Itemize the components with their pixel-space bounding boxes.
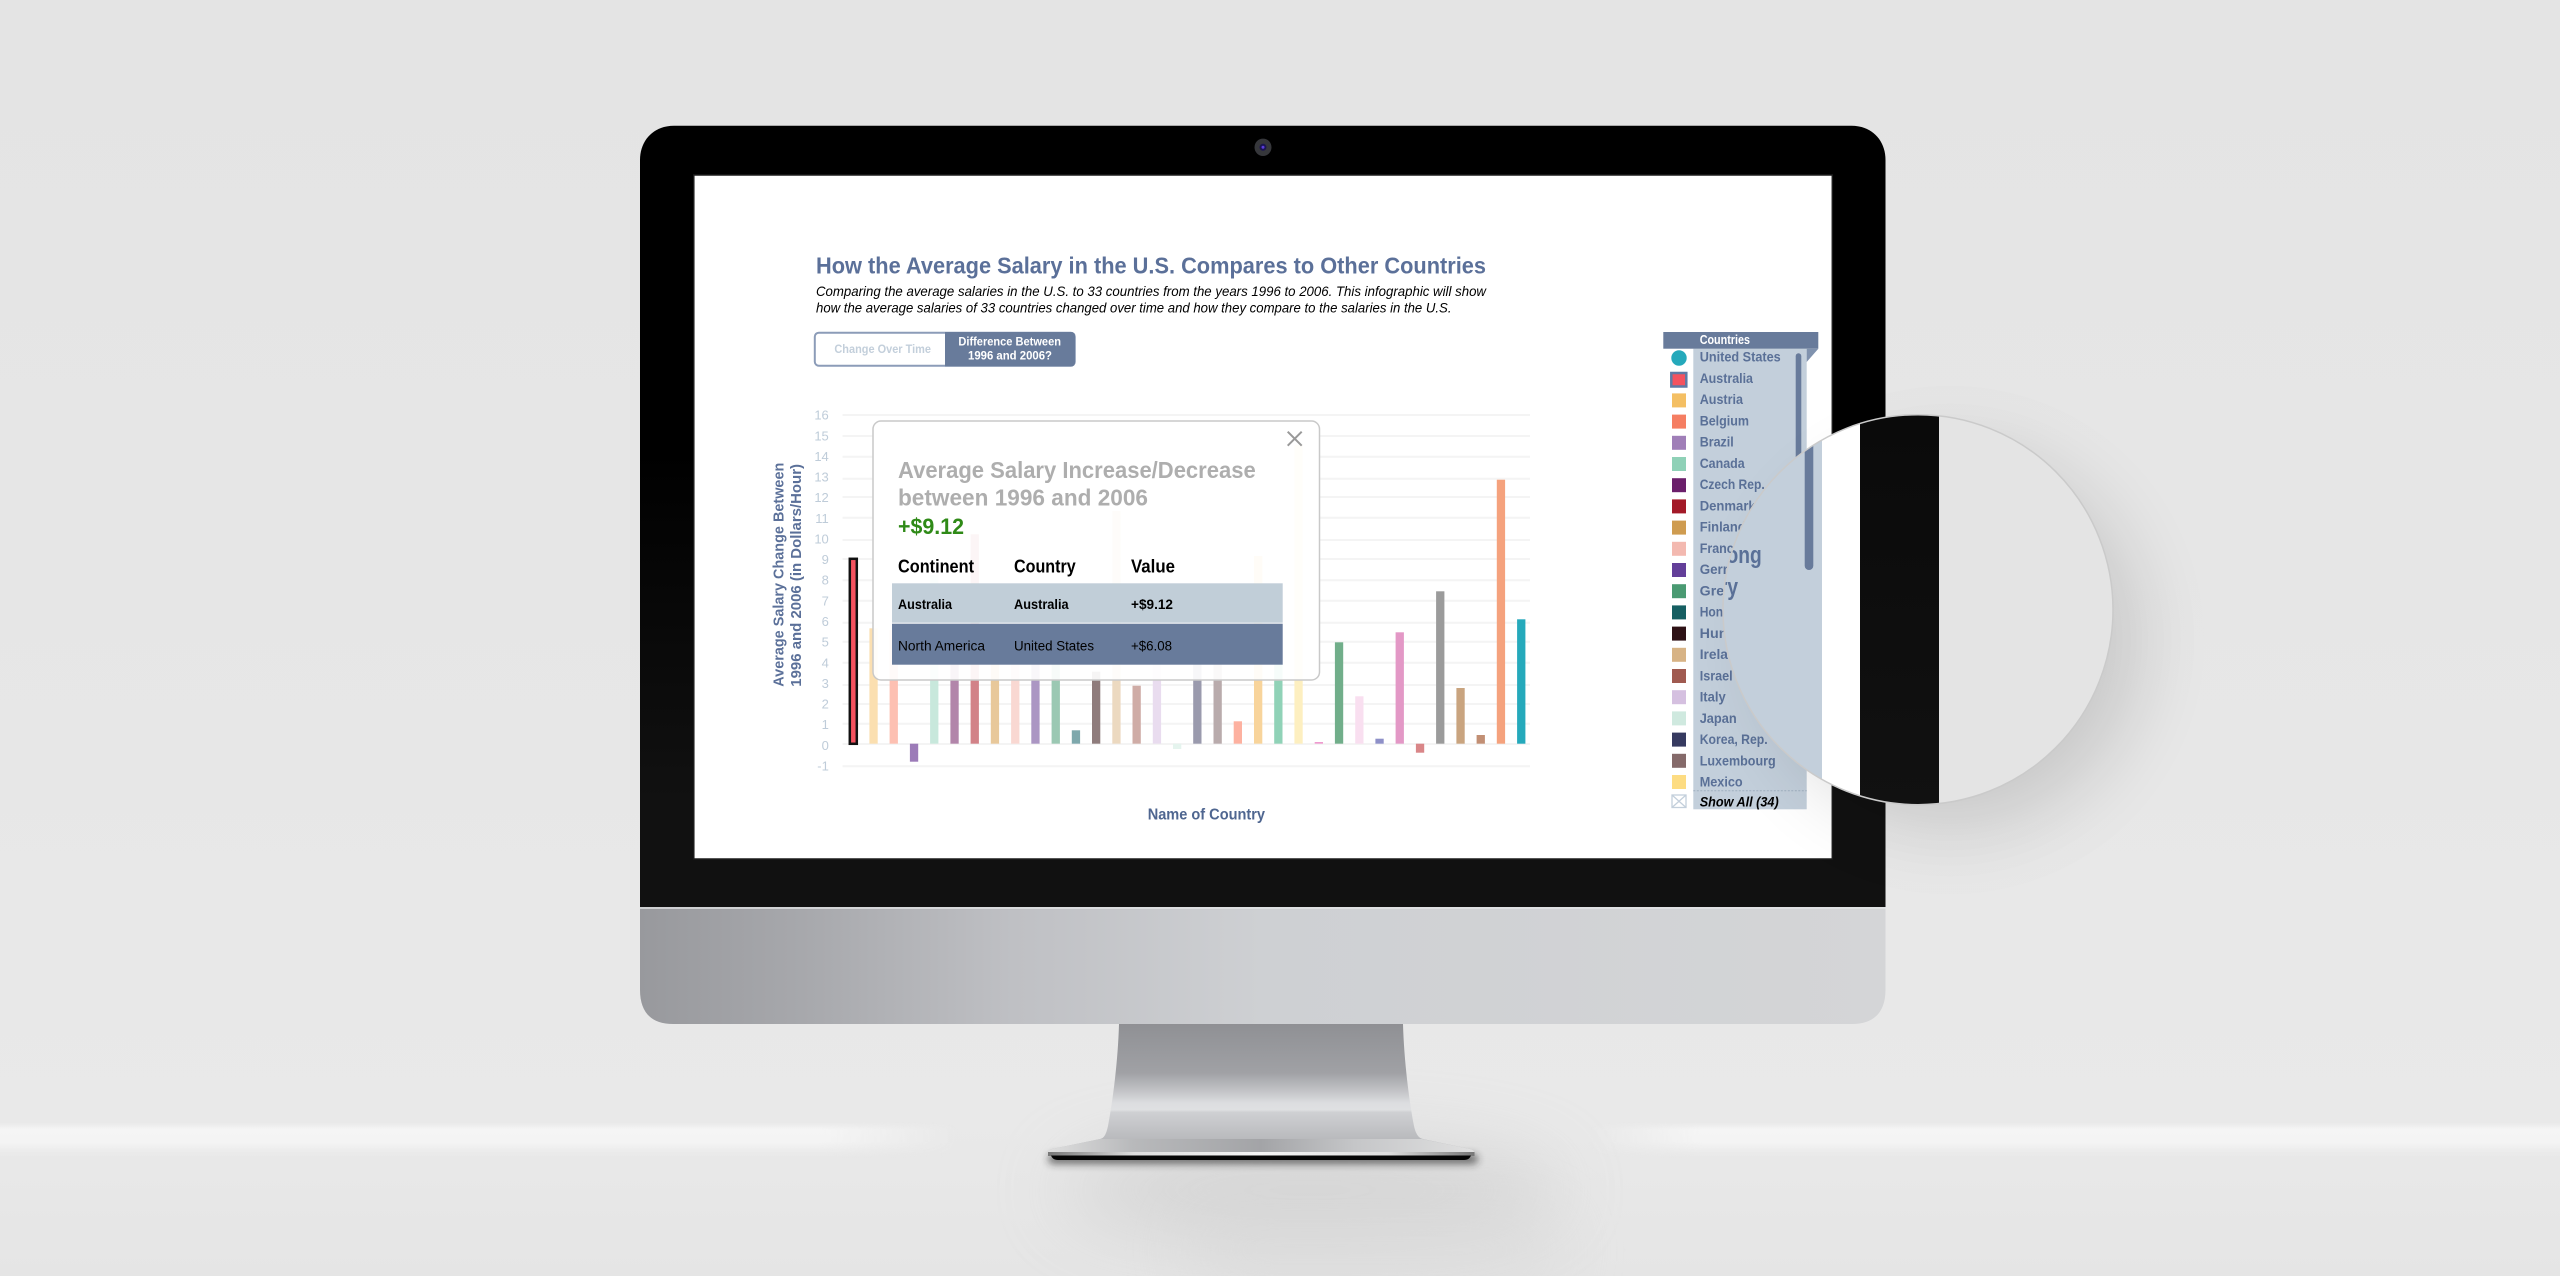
legend labels: Greece (1700, 582, 1748, 598)
y axis tick labels: 2 (822, 696, 829, 712)
legend header: Countries (1700, 333, 1750, 347)
y axis tick labels: 15 (814, 428, 829, 443)
table row: United States (892, 624, 1283, 665)
magnified scrollbar (1804, 446, 1814, 570)
icon: show all box (1672, 795, 1686, 808)
y axis title (770, 463, 805, 687)
table header: Continent (898, 556, 974, 576)
y axis tick labels: 14 (814, 449, 829, 464)
dialog value: +$9.12 (898, 514, 964, 539)
legend divider (1693, 790, 1807, 792)
legend labels: Australia (1700, 370, 1753, 386)
legend labels: Denmark (1700, 498, 1756, 514)
table header: Value (1131, 556, 1175, 576)
toggle buttons: Difference Between (958, 335, 1061, 349)
legend labels: Hungary (1700, 625, 1758, 641)
chin highlight line (640, 907, 1886, 909)
legend labels (1700, 349, 1781, 790)
monitor stand (1048, 1024, 1474, 1160)
table row: Australia: +$9.12 (1131, 597, 1173, 612)
y axis tick labels: -1 (817, 758, 829, 773)
toggle buttons: Change Over Time (834, 342, 931, 356)
subtitle: Comparing the average salaries in the U.S. to 33 countries from the years 1996 to 2006. This infographic will show (816, 283, 1487, 299)
legend labels: Israel (1700, 668, 1733, 684)
subtitle: how the average salaries of 33 countries changed over time and how they compare to the salaries in the U.S. (816, 300, 1452, 316)
legend labels: Luxembourg (1700, 752, 1776, 768)
y axis tick labels: 11 (815, 511, 829, 526)
horizontal light band on floor (0, 1127, 2560, 1146)
legend labels: Czech Rep. (1700, 476, 1765, 492)
toggle buttons (815, 332, 1075, 366)
panel: countries legend (1663, 332, 1818, 810)
icon: close button (1288, 432, 1302, 446)
chart grid lines (842, 415, 1530, 766)
y axis tick labels: 16 (814, 408, 829, 423)
legend labels: Finland (1700, 519, 1746, 535)
table header (898, 556, 1175, 576)
stand shadow on floor (1048, 1144, 1560, 1276)
table row: United States: North America (898, 638, 985, 653)
magnifier lens (1722, 414, 2113, 806)
magnified legend text: Hungary (1660, 573, 1738, 601)
title: How the Average Salary in the U.S. Compares to Other Countries (816, 252, 1486, 278)
legend labels: Italy (1700, 689, 1726, 705)
x axis title: Name of Country (1148, 806, 1265, 823)
dialog heading: Average Salary Increase/Decrease (898, 457, 1256, 483)
show all label: Show All (34) (1700, 794, 1779, 810)
y axis tick labels: 0 (822, 738, 829, 753)
y axis tick labels: 6 (822, 614, 829, 629)
y axis tick labels: 13 (814, 470, 829, 485)
dialog heading: between 1996 and 2006 (898, 485, 1148, 511)
y axis tick labels: 3 (822, 676, 829, 691)
legend labels: Germany (1700, 561, 1758, 577)
legend labels: Austria (1700, 391, 1743, 407)
icon: webcam (1254, 139, 1272, 156)
legend labels: Hong Kong (1700, 604, 1765, 620)
magnifier shadow (1760, 450, 2140, 830)
legend labels: Brazil (1700, 434, 1734, 450)
toggle buttons: 1996 and 2006? (968, 348, 1052, 362)
subtitle (816, 283, 1487, 316)
table row: Australia: Australia (1014, 597, 1069, 612)
legend swatches (1671, 350, 1687, 789)
magnified legend text: Hong Kong (1658, 541, 1762, 569)
legend list background (1693, 349, 1807, 809)
legend labels: United States (1700, 349, 1781, 365)
y axis tick labels: 4 (822, 655, 829, 670)
legend scrollbar (1796, 353, 1801, 533)
magnified legend text (1725, 550, 1760, 600)
y axis tick labels: 5 (822, 635, 829, 650)
bars (869, 445, 1525, 762)
legend labels: Canada (1700, 455, 1745, 471)
y axis tick labels: 8 (822, 573, 829, 588)
y axis tick labels: 7 (822, 593, 829, 608)
legend labels: Japan (1700, 710, 1737, 726)
table row: United States: +$6.08 (1131, 638, 1172, 653)
y axis tick labels: 12 (814, 490, 829, 505)
legend labels: Ireland (1700, 646, 1745, 662)
dialog heading (898, 457, 1256, 511)
legend header (1663, 332, 1818, 362)
bar chart (814, 408, 1530, 773)
panel: tooltip dialog (873, 421, 1320, 680)
monitor chin (640, 907, 1886, 1024)
y axis title: 1996 and 2006 (in Dollars/Hour) (788, 464, 805, 687)
y axis tick labels: 9 (822, 552, 829, 567)
y axis tick labels: 1 (822, 717, 829, 732)
table row: Australia: Australia (898, 597, 952, 612)
legend labels: France (1700, 540, 1741, 556)
table header: Country (1014, 556, 1076, 576)
legend labels: Korea, Rep. (1700, 731, 1768, 747)
monitor bezel (640, 126, 1886, 907)
table row: Australia (892, 583, 1283, 623)
legend labels: Belgium (1700, 412, 1749, 428)
y axis title: Average Salary Change Between (770, 463, 787, 687)
legend labels: Mexico (1700, 774, 1743, 790)
screen (694, 175, 1832, 859)
y axis tick labels (814, 408, 829, 773)
selected bar: Australia (850, 559, 857, 744)
table row: United States: United States (1014, 638, 1094, 653)
y axis tick labels: 10 (814, 532, 829, 546)
